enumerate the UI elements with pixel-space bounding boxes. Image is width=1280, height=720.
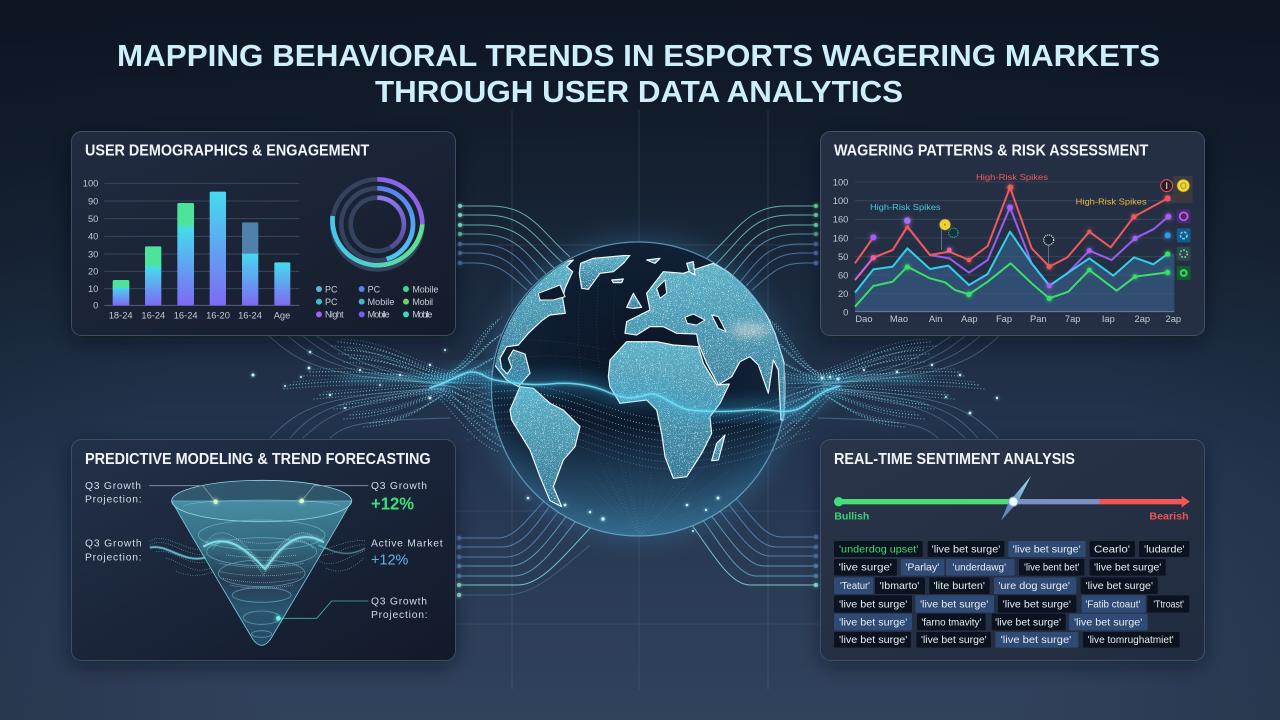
keyword tags: 'Ttroast' (1153, 599, 1184, 610)
keyword tags: 'Fatib ctoaut' (1085, 599, 1140, 610)
keyword tags (834, 541, 1189, 648)
legend (316, 284, 438, 320)
keyword tags: 'live bet surge' (932, 544, 1001, 555)
chart pins (940, 219, 1054, 267)
main title: THROUGH USER DATA ANALYTICS (375, 75, 903, 109)
keyword tags: 'lite burten' (933, 581, 985, 592)
panel: predictive modeling (71, 440, 456, 666)
keyword tags: Cearlo' (1094, 544, 1130, 555)
keyword tags: 'live bet surge' (1086, 581, 1153, 592)
panel: wagering patterns (820, 132, 1205, 341)
left labels: Q3 Growth (85, 481, 141, 492)
keyword tags: 'farno tmavity' (921, 617, 981, 628)
right labels (371, 481, 443, 621)
keyword tags: 'Teatur' (840, 581, 870, 592)
bar chart (83, 179, 299, 320)
legend: PC (325, 297, 338, 307)
left labels: Q3 Growth (85, 539, 142, 550)
line chart (855, 182, 1174, 312)
axis labels: Mao (890, 314, 908, 324)
keyword tags: 'live tomrughatmiet' (1088, 635, 1174, 646)
sentiment slider: Bullish (834, 512, 869, 523)
right labels: Active Market (371, 539, 443, 550)
keyword tags: 'underdog upset' (839, 544, 918, 555)
heading: REAL-TIME SENTIMENT ANALYSIS (834, 451, 1075, 468)
sentiment slider: Bearish (1149, 512, 1189, 523)
right labels: Q3 Growth (371, 596, 427, 607)
legend: Mobil (412, 297, 433, 307)
funnel (150, 480, 366, 645)
bar chart: 18-24 (109, 310, 133, 320)
side icons (1161, 176, 1193, 280)
keyword tags: 'live bet surge' (1074, 617, 1142, 628)
axis labels: Fap (996, 314, 1012, 324)
right labels: +12% (371, 552, 408, 568)
keyword tags: 'live bet surge' (839, 599, 908, 610)
spike labels: High-Risk Spikes (976, 172, 1049, 182)
axis labels: Ain (929, 314, 942, 324)
heading: WAGERING PATTERNS & RISK ASSESSMENT (834, 142, 1149, 159)
left labels: Projection: (85, 495, 142, 506)
panel: sentiment analysis (820, 440, 1205, 666)
legend: Mobile (412, 284, 438, 294)
axis labels: 2ap (1135, 314, 1150, 324)
bar chart: 16-24 (238, 310, 262, 320)
legend: PC (325, 284, 338, 294)
bar chart: 16-20 (206, 310, 230, 320)
axis labels: 2ap (1166, 314, 1181, 324)
bar chart: 40 (88, 232, 98, 242)
keyword tags: 'live bet surge' (839, 635, 908, 646)
keyword tags: 'live bet surge' (1003, 599, 1071, 610)
keyword tags: 'ure dog surge' (998, 581, 1070, 592)
main title: MAPPING BEHAVIORAL TRENDS IN ESPORTS WAGERING MARKETS (117, 39, 1160, 73)
bar chart: 16-24 (141, 310, 165, 320)
axis labels: 7ap (1065, 314, 1080, 324)
axis labels: 100 (833, 177, 848, 187)
bar chart: Age (274, 310, 290, 320)
main title (117, 39, 1160, 109)
axis labels: 160 (833, 233, 848, 243)
spike labels: High-Risk Spikes (870, 202, 941, 212)
axis labels: 60 (838, 270, 848, 280)
legend: Night (325, 310, 344, 320)
dotted wave bands across globe (468, 384, 810, 469)
axis labels: 160 (833, 215, 848, 225)
sentiment slider (834, 476, 1190, 523)
axis labels: Iap (1102, 314, 1115, 324)
right labels: Projection: (371, 610, 428, 621)
heading: PREDICTIVE MODELING & TREND FORECASTING (85, 451, 431, 468)
globe graticule (523, 270, 750, 535)
axis labels: Aap (961, 314, 978, 324)
spike labels (870, 172, 1147, 212)
axis labels: 50 (838, 252, 848, 262)
left labels: Projection: (85, 552, 142, 563)
keyword tags: 'live bet surge' (920, 599, 989, 610)
heading: USER DEMOGRAPHICS & ENGAGEMENT (85, 143, 370, 160)
axis labels (833, 177, 1181, 324)
keyword tags: 'live bent bet' (1024, 563, 1079, 574)
inland seas (538, 280, 726, 332)
keyword tags: 'live bet surge' (1013, 544, 1081, 555)
right labels: Q3 Growth (371, 481, 427, 492)
axis labels: Dao (855, 314, 873, 324)
bar chart: 10 (88, 284, 98, 294)
keyword tags: 'live bet surge' (1094, 563, 1161, 574)
asia glow (730, 324, 770, 336)
bar chart: 100 (83, 179, 98, 189)
bar chart: 50 (88, 214, 98, 224)
data markers (870, 184, 1171, 301)
globe (252, 239, 998, 539)
keyword tags: 'live bet surge' (995, 617, 1061, 628)
bar chart: 90 (88, 196, 98, 206)
keyword tags: 'live surge' (839, 563, 892, 574)
left labels (85, 481, 142, 563)
panel: user demographics (71, 132, 456, 341)
bar chart: 16-24 (174, 310, 198, 320)
bar chart: 0 (93, 301, 98, 311)
axis labels: 0 (843, 307, 848, 317)
callout lines (149, 486, 368, 621)
legend: Mobile (412, 310, 432, 320)
legend: Mobile (368, 297, 394, 307)
keyword tags: 'ludarde' (1144, 544, 1185, 555)
keyword tags: 'Parlay' (905, 563, 939, 574)
connector lines (457, 204, 818, 597)
legend: PC (368, 284, 381, 294)
keyword tags: 'live bet surge' (1001, 635, 1072, 646)
axis labels: 100 (833, 196, 848, 206)
continents (493, 255, 784, 507)
legend: Mobile (368, 310, 390, 320)
bar chart: 20 (88, 267, 98, 277)
axis labels: 20 (838, 289, 848, 299)
data stream: left (269, 315, 534, 452)
keyword tags: 'underdawg' (953, 563, 1006, 574)
keyword tags: 'live bet surge' (921, 635, 987, 646)
donut chart (332, 179, 422, 269)
right labels: +12% (371, 494, 414, 514)
particles (252, 349, 998, 532)
axis labels: Pan (1030, 314, 1047, 324)
keyword tags: 'Ibmarto' (879, 581, 919, 592)
spike labels: High-Risk Spikes (1076, 196, 1147, 206)
keyword tags: 'live bet surge' (839, 617, 908, 628)
equator light stream (430, 372, 840, 412)
bar chart: 30 (88, 249, 98, 259)
data stream: right (734, 315, 999, 452)
